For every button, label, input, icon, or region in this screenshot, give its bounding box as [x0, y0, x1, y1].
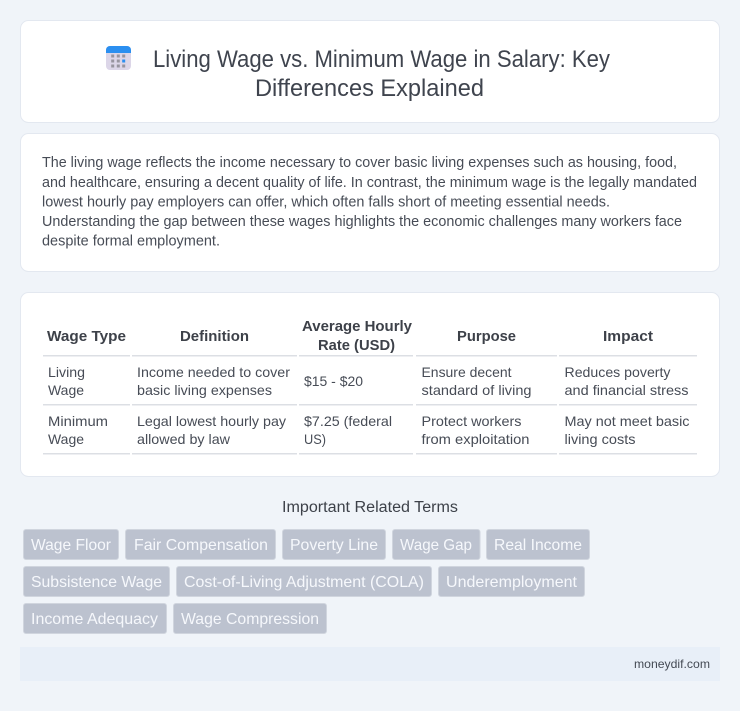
- table row: minimum wage: US): [304, 431, 326, 447]
- table header row: Rate (USD): [318, 337, 395, 354]
- panel: related term tags: Underemployment: [446, 574, 578, 591]
- table row: living wage: Living: [48, 364, 85, 380]
- panel: related term tags: Subsistence Wage: [31, 574, 162, 591]
- table row: living wage: Wage: [48, 382, 84, 398]
- footer bar: [20, 647, 720, 681]
- table header row: Definition: [180, 328, 249, 345]
- table header row: Wage Type: [47, 328, 126, 345]
- table row: living wage: [48, 364, 688, 398]
- panel: related term tags: Income Adequacy: [31, 611, 158, 628]
- intro text: despite formal employment.: [42, 234, 220, 250]
- table row: minimum wage: Legal lowest hourly pay: [137, 413, 286, 429]
- intro text: The living wage reflects the income necessary to cover basic living expenses such as housing, food,: [42, 155, 677, 171]
- intro text: lowest hourly pay employers can offer, which often falls short of meeting essential needs.: [42, 194, 610, 210]
- table row: living wage: Income needed to cover: [137, 364, 290, 380]
- table row: minimum wage: Minimum: [48, 413, 108, 429]
- panel: title header: [20, 20, 720, 122]
- panel: related term tags: Wage Floor: [31, 537, 112, 554]
- panel: related term tags: Cost-of-Living Adjustment (COLA): [184, 574, 424, 591]
- table header row: Impact: [603, 328, 653, 345]
- panel: comparison table: [20, 292, 720, 476]
- panel: introduction: [20, 134, 720, 272]
- panel: related term tags: Wage Gap: [400, 537, 472, 554]
- icon: calendar: [106, 46, 131, 70]
- table row: living wage: standard of living: [422, 382, 532, 398]
- table row: minimum wage: May not meet basic: [564, 413, 690, 429]
- panel: related term tags: Poverty Line: [290, 537, 378, 554]
- panel: related term tags: [24, 530, 590, 634]
- heading: important related terms: Important Related Terms: [282, 499, 458, 516]
- table row: living wage: $15 - $20: [304, 373, 363, 389]
- panel: related term tags: Real Income: [494, 537, 582, 554]
- title: Differences Explained: [255, 75, 484, 102]
- footer source: moneydif.com: [634, 657, 710, 671]
- table row: minimum wage: [48, 413, 690, 447]
- table row: minimum wage: allowed by law: [137, 431, 231, 447]
- table row: minimum wage: Wage: [48, 431, 84, 447]
- table header row: [47, 318, 653, 354]
- table row: living wage: Reduces poverty: [564, 364, 670, 380]
- table row: living wage: basic living expenses: [137, 382, 272, 398]
- table row: living wage: and financial stress: [564, 382, 688, 398]
- table row: minimum wage: Protect workers: [422, 413, 522, 429]
- table row: minimum wage: living costs: [564, 431, 636, 447]
- intro text: Understanding the gap between these wages highlights the economic challenges many workers face: [42, 214, 682, 230]
- table row: living wage: Ensure decent: [422, 364, 512, 380]
- table header row: Purpose: [457, 328, 516, 345]
- intro text: [42, 155, 697, 250]
- title: Living Wage vs. Minimum Wage in Salary: Key: [153, 46, 610, 73]
- title: [153, 46, 610, 102]
- panel: related term tags: Fair Compensation: [134, 537, 268, 554]
- intro text: and healthcare, ensuring a decent quality of life. In contrast, the minimum wage is the legally mandated: [42, 175, 697, 191]
- table row: minimum wage: $7.25 (federal: [304, 413, 392, 429]
- panel: related term tags: Wage Compression: [181, 611, 319, 628]
- table row: minimum wage: from exploitation: [422, 431, 530, 447]
- table header row: Average Hourly: [302, 318, 413, 335]
